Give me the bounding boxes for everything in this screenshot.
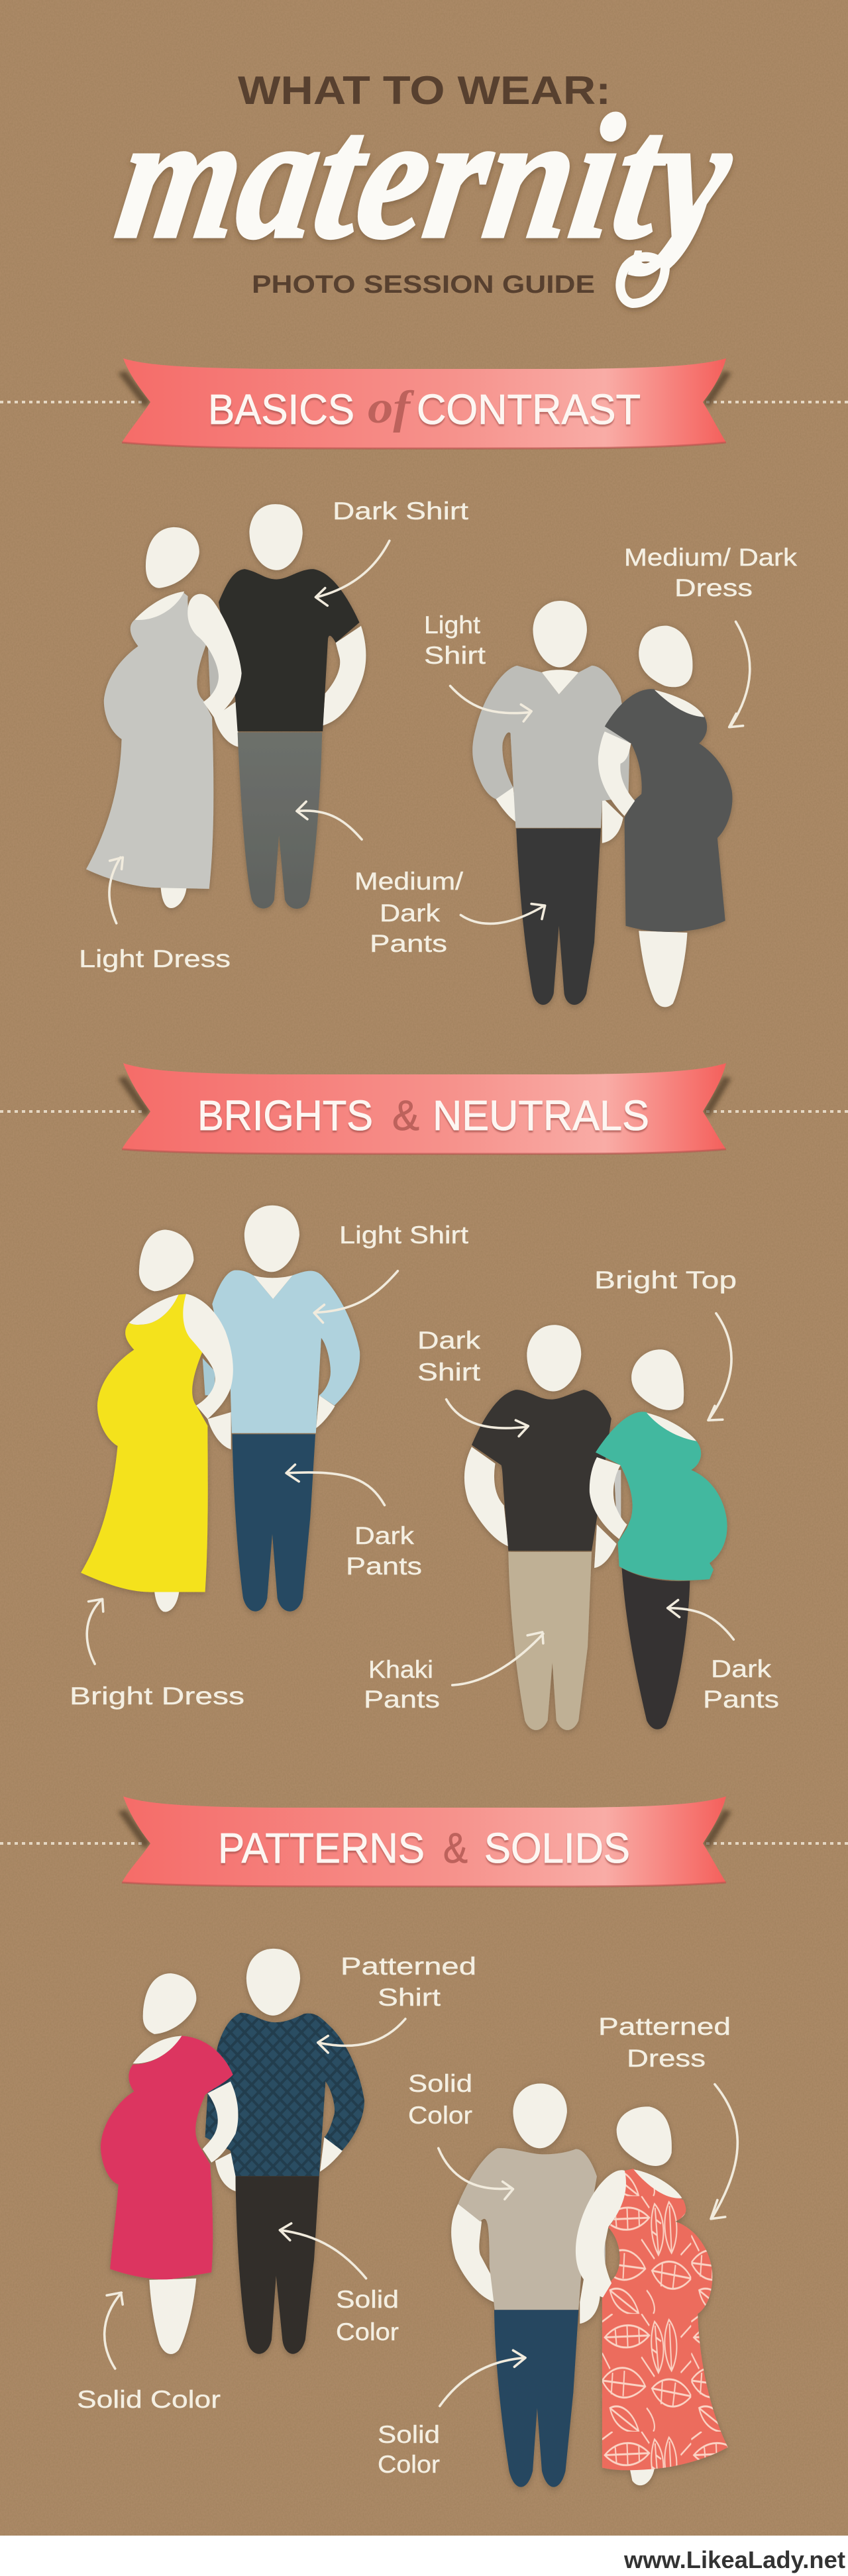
arrow: patterned shirt — [318, 2019, 405, 2053]
chest — [129, 1294, 178, 1325]
labels: section 3: Solid — [408, 2070, 472, 2097]
labels: section 3: Solid — [336, 2286, 399, 2313]
title block — [107, 68, 745, 303]
woman arm — [590, 1457, 627, 1539]
labels: section 2: Bright Top — [594, 1266, 737, 1294]
ribbon heading: basics of contrast — [0, 358, 848, 448]
neck — [647, 1413, 696, 1441]
solid shirt — [458, 2148, 597, 2310]
labels: section 2: Pants — [703, 1686, 779, 1713]
ribbon heading: brights and neutrals: & — [392, 1092, 419, 1139]
patterned sweater — [205, 2013, 364, 2176]
neck — [633, 2169, 682, 2198]
man hand behind — [580, 2279, 600, 2324]
couple 1: light dress and dark shirt — [86, 504, 390, 923]
couple 6: solid shirt and patterned dress — [439, 2083, 737, 2487]
panel: basics of contrast — [0, 358, 848, 1007]
woman head — [631, 1349, 684, 1410]
labels: section 2 — [70, 1221, 779, 1713]
labels: section 1: Medium/ Dark — [624, 544, 798, 571]
labels: section 3: Dress — [627, 2045, 706, 2072]
arrow: solid pants — [440, 2350, 525, 2406]
arrow: light shirt — [450, 686, 531, 721]
labels: section 3: Solid Color — [77, 2386, 221, 2413]
woman head — [143, 1973, 196, 2034]
wrist — [496, 787, 517, 823]
arrow: solid dress — [105, 2293, 123, 2369]
sleeve sliver — [598, 2236, 606, 2273]
woman chest — [134, 592, 184, 620]
ribbon heading: patterns and solids — [0, 1796, 848, 1886]
arrow: light shirt — [314, 1271, 398, 1323]
arrow: dark pants — [668, 1600, 733, 1639]
couple 4: dark shirt and bright top — [447, 1314, 733, 1730]
woman head — [139, 1230, 193, 1291]
black pants — [516, 829, 601, 1005]
man head — [249, 504, 303, 570]
woman feet — [629, 2467, 655, 2485]
labels: section 1: Light — [424, 611, 481, 639]
labels: section 2: Shirt — [417, 1359, 481, 1386]
labels: section 1: Medium/ — [354, 868, 464, 895]
arrow: dark dress — [729, 622, 750, 727]
labels: section 3: Color — [336, 2318, 399, 2345]
black pants — [236, 2176, 319, 2354]
arrow: dark pants — [460, 904, 545, 923]
wrist — [316, 1396, 335, 1428]
labels: section 3: Shirt — [378, 1984, 441, 2011]
title: what to wear: WHAT TO WEAR: — [238, 68, 611, 113]
dark shirt — [472, 1390, 611, 1551]
man head — [244, 1206, 299, 1272]
teal top — [596, 1412, 727, 1580]
man head — [527, 1325, 581, 1392]
man hand behind — [594, 1525, 617, 1568]
gray sleeve sliver — [208, 646, 220, 699]
woman arm — [183, 1294, 233, 1419]
man head — [513, 2083, 567, 2148]
ribbon heading: basics of contrast: CONTRAST — [417, 386, 641, 433]
woman feet — [154, 1590, 180, 1612]
labels: section 3: Patterned — [598, 2013, 731, 2040]
couple 3: bright dress and light shirt — [81, 1206, 398, 1664]
ribbon heading: basics of contrast: of — [368, 382, 415, 433]
couple 2: light shirt and dark dress — [450, 601, 750, 1007]
labels: section 2: Dark — [417, 1327, 481, 1354]
neck — [133, 2035, 182, 2063]
labels: section 2: Pants — [346, 1553, 422, 1580]
light sweater — [472, 666, 629, 828]
man arm — [451, 2204, 494, 2302]
labels: section 2: Dark — [711, 1655, 772, 1682]
man hand behind — [214, 700, 238, 747]
panel: patterns and solids — [0, 1796, 848, 2487]
arrow: solid shirt — [439, 2148, 513, 2199]
man hand behind — [602, 798, 623, 843]
arrow: medium pants — [297, 801, 362, 839]
woman arm — [598, 731, 635, 816]
ribbon heading: brights and neutrals: BRIGHTS — [197, 1092, 373, 1139]
arrow: dark shirt — [447, 1400, 528, 1436]
labels: section 2: Light Shirt — [339, 1221, 469, 1249]
woman leggings — [622, 1568, 690, 1729]
sweater arm behind — [203, 1358, 215, 1396]
panel: brights and neutrals — [0, 1063, 848, 1730]
couple 5: solid dress and patterned shirt — [101, 1949, 405, 2369]
labels: section 2: Khaki — [368, 1656, 433, 1683]
man hand behind — [207, 1412, 231, 1449]
khaki pants — [508, 1552, 592, 1730]
woman leg — [639, 931, 687, 1007]
footer: source strip: www.LikeaLady.net — [623, 2546, 845, 2573]
sleeve sliver — [614, 1470, 621, 1518]
arrow: dark shirt — [315, 541, 390, 605]
labels: section 1: Shirt — [424, 642, 486, 669]
labels: section 1: Dress — [674, 574, 753, 601]
labels: section 2: Bright Dress — [70, 1682, 244, 1710]
subtitle: PHOTO SESSION GUIDE — [252, 271, 595, 299]
woman head — [617, 2106, 672, 2166]
arrow: bright top — [708, 1314, 731, 1420]
arrow: dark pants — [286, 1465, 385, 1505]
woman head — [639, 626, 692, 687]
light dress — [86, 593, 213, 889]
labels: section 2: Pants — [364, 1686, 440, 1713]
dark dress — [605, 689, 732, 932]
navy pants — [494, 2310, 578, 2487]
man arm — [464, 1447, 508, 1547]
woman leg — [149, 2279, 196, 2354]
woman arm — [576, 2170, 626, 2297]
labels: section 1: Light Dress — [79, 945, 231, 972]
dark shirt — [219, 569, 359, 731]
neck — [542, 670, 578, 694]
woman feet — [160, 886, 187, 908]
ribbon heading: patterns and solids: SOLIDS — [484, 1824, 630, 1872]
woman arm — [203, 2081, 238, 2163]
labels: section 3: Color — [378, 2451, 440, 2478]
yellow dress — [81, 1294, 208, 1592]
neck skin — [655, 690, 704, 717]
wrist — [320, 2138, 343, 2172]
labels: section 1: Dark Shirt — [333, 497, 469, 525]
footer: source strip — [0, 2536, 848, 2576]
woman arm — [187, 594, 242, 719]
man head — [533, 601, 587, 667]
ribbon heading: brights and neutrals: NEUTRALS — [433, 1092, 649, 1139]
pink dress — [101, 2035, 233, 2279]
arrow: bright dress — [87, 1599, 103, 1664]
labels: section 3: Patterned — [341, 1953, 476, 1980]
patterned dress — [602, 2169, 728, 2470]
arrow: light dress — [109, 857, 123, 923]
labels: section 3: Color — [408, 2102, 472, 2129]
woman head — [146, 527, 199, 588]
arrow: khaki pants — [452, 1632, 543, 1685]
labels: section 3: Solid — [378, 2421, 440, 2448]
title: maternity script: maternity — [107, 79, 745, 276]
navy pants — [233, 1434, 315, 1612]
ribbon heading: basics of contrast: BASICS — [208, 386, 354, 433]
labels: section 2: Dark — [354, 1522, 415, 1549]
ribbon heading: patterns and solids: & — [443, 1824, 468, 1872]
man hand behind — [215, 2151, 236, 2191]
arrow: solid pants — [280, 2224, 366, 2279]
medium gray pants — [238, 733, 322, 909]
man head — [246, 1949, 300, 2016]
light blue sweater — [212, 1270, 360, 1433]
labels: section 1: Pants — [370, 930, 447, 957]
man arm — [323, 626, 366, 725]
ribbon heading: brights and neutrals — [0, 1063, 848, 1154]
ribbon heading: patterns and solids: PATTERNS — [218, 1824, 425, 1872]
labels: section 3 — [77, 1953, 731, 2478]
labels: section 1 — [79, 497, 798, 972]
neck — [253, 1275, 293, 1299]
labels: section 1: Dark — [380, 900, 441, 927]
arrow: patterned dress — [711, 2085, 737, 2219]
